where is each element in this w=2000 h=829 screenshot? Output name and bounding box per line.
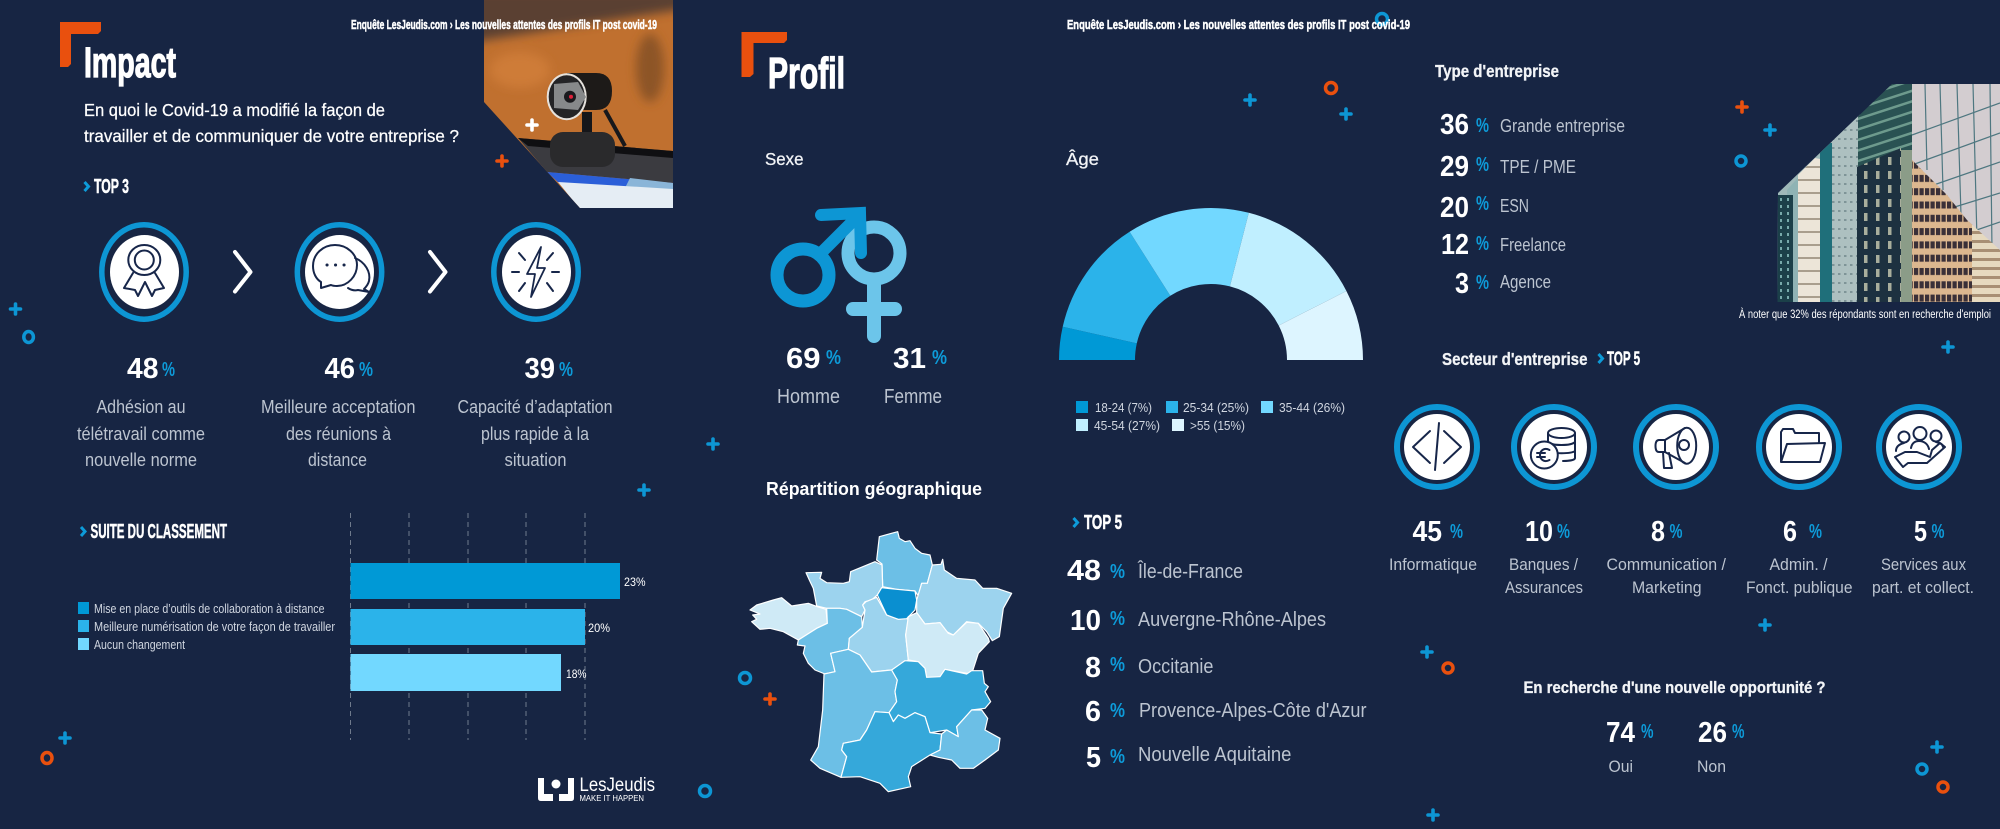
- row: freelance: %: [1476, 233, 1489, 255]
- row: TPE / PME: TPE / PME: [1500, 157, 1576, 177]
- region row: PACA: 6: [1085, 696, 1101, 728]
- stat: 48%: [127, 353, 175, 385]
- stat: banques: 10: [1525, 516, 1553, 548]
- row: grande entreprise: Grande entreprise: [1500, 116, 1625, 136]
- age legend: 18-24 (7%): [1095, 401, 1152, 415]
- heading: suite du classement: [81, 521, 227, 543]
- region row: Nouvelle Aquitaine: %: [1110, 746, 1125, 768]
- bar chart legend: Meilleure numérisation de votre façon de travailler: [94, 620, 335, 634]
- region row: Île-de-France: [1067, 555, 1243, 587]
- stat: communication: 8: [1651, 516, 1665, 548]
- stat: homme: 69: [786, 343, 820, 375]
- row: TPE / PME: 29: [1440, 151, 1469, 183]
- bar chart legend: [78, 602, 335, 652]
- stat: banques: [1505, 516, 1583, 597]
- label: adaptation: Capacité d’adaptation: [458, 397, 612, 417]
- survey header: Enquête LesJeudis.com › Les nouvelles attentes des profils IT post covid-19: [1067, 17, 1410, 32]
- region row: Occitanie: 8: [1085, 652, 1101, 684]
- stat: femme: Femme: [884, 386, 942, 408]
- stat: 46%: 46: [324, 353, 355, 385]
- stat: informatique: [1389, 516, 1477, 574]
- row: agence: Agence: [1500, 272, 1551, 292]
- panel: entreprise: [1389, 61, 2000, 776]
- photo: webcam: [484, 0, 673, 208]
- region row: Nouvelle Aquitaine: Nouvelle Aquitaine: [1138, 744, 1292, 766]
- icon: orange corner bracket: [742, 32, 787, 77]
- bar chart legend: Mise en place d’outils de collaboration à distance: [94, 602, 325, 616]
- age legend: >55 (15%): [1190, 419, 1245, 433]
- stat: oui: 74: [1606, 717, 1635, 749]
- logo: LesJeudis: LesJeudis: [580, 775, 655, 796]
- stat: communication: Marketing: [1632, 579, 1702, 597]
- row: grande entreprise: [1440, 109, 1625, 141]
- label: réunions: des réunions à: [286, 424, 392, 444]
- icon: orange corner bracket: [60, 22, 101, 67]
- bar chart: 23%: [624, 575, 646, 589]
- region row: PACA: %: [1110, 700, 1125, 722]
- stat: 46%: [324, 353, 373, 385]
- stat: informatique: Informatique: [1389, 556, 1477, 574]
- heading: suite du classement: SUITE DU CLASSEMENT: [90, 521, 227, 543]
- age legend: 45-54 (27%): [1094, 419, 1160, 433]
- heading: sexe: Sexe: [765, 149, 804, 169]
- row: ESN: %: [1476, 193, 1489, 215]
- region row: Occitanie: [1085, 652, 1214, 684]
- label: adaptation: plus rapide à la: [481, 424, 590, 444]
- row: ESN: 20: [1440, 192, 1469, 224]
- stat: administration: 6: [1783, 516, 1797, 548]
- stat: homme: [777, 343, 841, 408]
- icon: people in hand: [1879, 407, 1959, 487]
- stat: non: 26: [1698, 717, 1727, 749]
- stat: services: part. et collect.: [1872, 579, 1974, 597]
- bar chart: 18%: [566, 667, 587, 681]
- stat: oui: %: [1641, 721, 1654, 743]
- stat: oui: Oui: [1608, 758, 1633, 776]
- stat: services: 5: [1914, 516, 1927, 548]
- stat: femme: %: [932, 347, 947, 369]
- stat: 39%: 39: [524, 353, 555, 385]
- region row: Auvergne-Rhône-Alpes: 10: [1070, 605, 1101, 637]
- row: grande entreprise: 36: [1440, 109, 1469, 141]
- row: freelance: Freelance: [1500, 235, 1566, 255]
- stat: communication: Communication /: [1606, 556, 1726, 574]
- stat: homme: Homme: [777, 386, 840, 408]
- row: agence: 3: [1455, 268, 1469, 300]
- map: France regions: [750, 532, 1012, 792]
- heading: secteur d'entreprise: Secteur d'entreprise: [1442, 349, 1588, 369]
- stat: informatique: %: [1450, 521, 1463, 543]
- panel: profil: [742, 17, 1410, 792]
- question: [84, 100, 459, 146]
- title: Impact: Impact: [84, 39, 176, 87]
- region row: Nouvelle Aquitaine: [1086, 742, 1292, 774]
- row: TPE / PME: [1440, 151, 1576, 183]
- stat: administration: %: [1809, 521, 1822, 543]
- stat: administration: Admin. /: [1770, 556, 1828, 574]
- region row: Auvergne-Rhône-Alpes: Auvergne-Rhône-Alpes: [1138, 609, 1326, 631]
- row: freelance: 12: [1441, 229, 1469, 261]
- row: grande entreprise: %: [1476, 115, 1489, 137]
- stat: 39%: [524, 353, 573, 385]
- row: freelance: [1441, 229, 1566, 261]
- label: adhésion: Adhésion au: [96, 397, 186, 417]
- icon: lightning: [494, 225, 578, 319]
- stat: communication: [1606, 516, 1726, 597]
- row: ESN: ESN: [1500, 196, 1529, 216]
- icon: gender symbols: [777, 213, 900, 336]
- stat: services: [1872, 516, 1974, 597]
- region row: Île-de-France: %: [1110, 561, 1125, 583]
- stat: informatique: 45: [1412, 516, 1442, 548]
- stat: non: Non: [1697, 758, 1726, 776]
- region row: PACA: [1085, 696, 1367, 728]
- label: adhésion: [77, 397, 205, 470]
- stat: administration: [1746, 516, 1852, 597]
- stat: banques: Assurances: [1505, 579, 1583, 597]
- stat: banques: Banques /: [1509, 556, 1578, 574]
- age legend: 25-34 (25%): [1183, 401, 1249, 415]
- row: ESN: [1440, 192, 1529, 224]
- stat: non: %: [1732, 721, 1745, 743]
- label: adhésion: télétravail comme: [77, 424, 205, 444]
- label: réunions: [261, 397, 416, 470]
- stat: femme: [884, 343, 947, 408]
- heading: âge: Âge: [1066, 149, 1099, 169]
- age legend: [1076, 401, 1345, 433]
- question: En quoi le Covid-19 a modifié la façon de: [84, 100, 385, 120]
- stat: 48%: %: [162, 359, 175, 381]
- stat: banques: %: [1557, 521, 1570, 543]
- stat: services: Services aux: [1881, 556, 1967, 574]
- stat: 48%: 48: [127, 353, 158, 385]
- stat: services: %: [1932, 521, 1945, 543]
- icon: folder: [1759, 407, 1839, 487]
- stat: non: [1697, 717, 1745, 776]
- logo: LesJeudis: [538, 775, 655, 803]
- panel: impact: [60, 17, 657, 803]
- icon: speech bubbles: [297, 225, 382, 319]
- label: réunions: Meilleure acceptation: [261, 397, 416, 417]
- heading: secteur d'entreprise: TOP 5: [1607, 349, 1640, 370]
- row: agence: %: [1476, 272, 1489, 294]
- row: agence: [1455, 268, 1551, 300]
- arrow: [235, 252, 250, 292]
- stat: 39%: %: [559, 359, 573, 381]
- heading: en recherche: En recherche d'une nouvelle opportunité ?: [1524, 679, 1826, 697]
- label: réunions: distance: [308, 450, 367, 470]
- region row: Auvergne-Rhône-Alpes: [1070, 605, 1326, 637]
- stat: administration: Fonct. publique: [1746, 579, 1852, 597]
- label: adaptation: [458, 397, 612, 470]
- heading: top 3: TOP 3: [94, 176, 129, 198]
- bar chart: 20%: [588, 621, 610, 635]
- region row: Nouvelle Aquitaine: 5: [1086, 742, 1101, 774]
- region row: Auvergne-Rhône-Alpes: %: [1110, 608, 1125, 630]
- region row: Occitanie: Occitanie: [1138, 656, 1214, 678]
- stat: femme: 31: [893, 343, 926, 375]
- icon: code: [1397, 407, 1477, 487]
- label: adaptation: situation: [504, 450, 566, 470]
- icon: megaphone: [1636, 407, 1716, 487]
- region row: PACA: Provence-Alpes-Côte d'Azur: [1139, 700, 1367, 722]
- heading: top 3: [84, 176, 129, 198]
- region row: Île-de-France: 48: [1067, 555, 1101, 587]
- survey header: Enquête LesJeudis.com › Les nouvelles attentes des profils IT post covid-19: [351, 17, 657, 32]
- bar chart: [350, 513, 646, 740]
- icon: coins: [1514, 407, 1594, 487]
- arrow: [430, 252, 446, 292]
- stat: oui: [1606, 717, 1654, 776]
- icon: award badge: [102, 225, 186, 319]
- photo: office towers: [1770, 84, 2000, 302]
- heading: top 5 regions: TOP 5: [1084, 512, 1122, 534]
- chart: age half donut: [1059, 208, 1363, 360]
- stat: 46%: %: [359, 359, 373, 381]
- question: travailler et de communiquer de votre entreprise ?: [84, 126, 459, 146]
- heading: répartition géographique: Répartition géographique: [766, 479, 982, 499]
- row: TPE / PME: %: [1476, 154, 1489, 176]
- age legend: 35-44 (26%): [1279, 401, 1345, 415]
- label: adhésion: nouvelle norme: [85, 450, 197, 470]
- logo: LesJeudis: MAKE IT HAPPEN: [580, 794, 644, 803]
- heading: type d'entreprise: Type d'entreprise: [1435, 61, 1559, 81]
- stat: communication: %: [1670, 521, 1683, 543]
- stat: homme: %: [826, 347, 841, 369]
- region row: Occitanie: %: [1110, 654, 1125, 676]
- region row: Île-de-France: Île-de-France: [1137, 560, 1243, 583]
- heading: top 5 regions: [1074, 512, 1122, 534]
- title: Profil: Profil: [768, 49, 845, 98]
- bar chart legend: Aucun changement: [94, 638, 185, 652]
